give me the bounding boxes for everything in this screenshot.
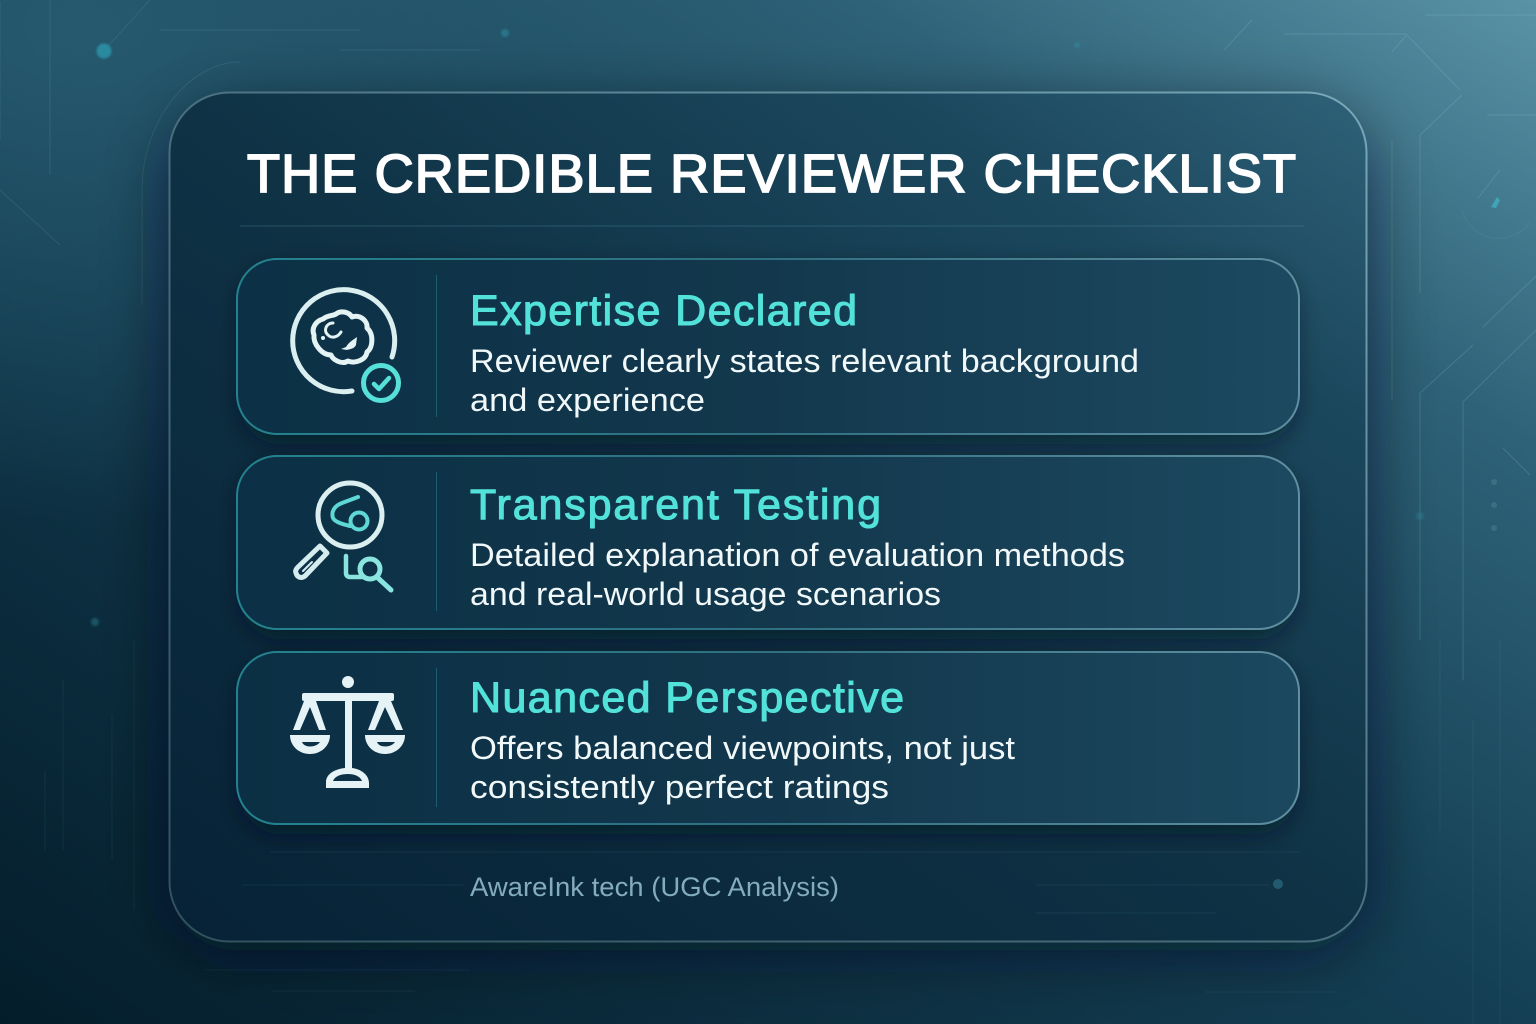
footer decorative lines	[242, 852, 1300, 913]
card: Nuanced Perspective	[237, 652, 1299, 834]
description: Offers balanced viewpoints, not just	[470, 730, 1015, 766]
icon: magnifying glasses and test tool	[296, 483, 391, 590]
description: consistently perfect ratings	[470, 769, 889, 805]
title divider	[240, 225, 1304, 227]
icon: balance scales	[290, 676, 405, 788]
heading: Expertise Declared	[470, 287, 857, 335]
card: Transparent Testing	[237, 456, 1299, 639]
description: Reviewer clearly states relevant background	[470, 343, 1139, 379]
card: Expertise Declared	[237, 259, 1299, 444]
description: and experience	[470, 382, 705, 418]
heading: Nuanced Perspective	[470, 674, 904, 722]
heading: Transparent Testing	[470, 481, 881, 529]
source attribution: AwareInk tech (UGC Analysis)	[470, 872, 839, 902]
background nodes	[91, 29, 1500, 626]
panel: checklist container	[170, 92, 1366, 950]
description: Detailed explanation of evaluation methods	[470, 537, 1125, 573]
icon: head with brain and check badge	[293, 290, 398, 400]
description: and real-world usage scenarios	[470, 576, 941, 612]
title: THE CREDIBLE REVIEWER CHECKLIST	[247, 144, 1296, 204]
